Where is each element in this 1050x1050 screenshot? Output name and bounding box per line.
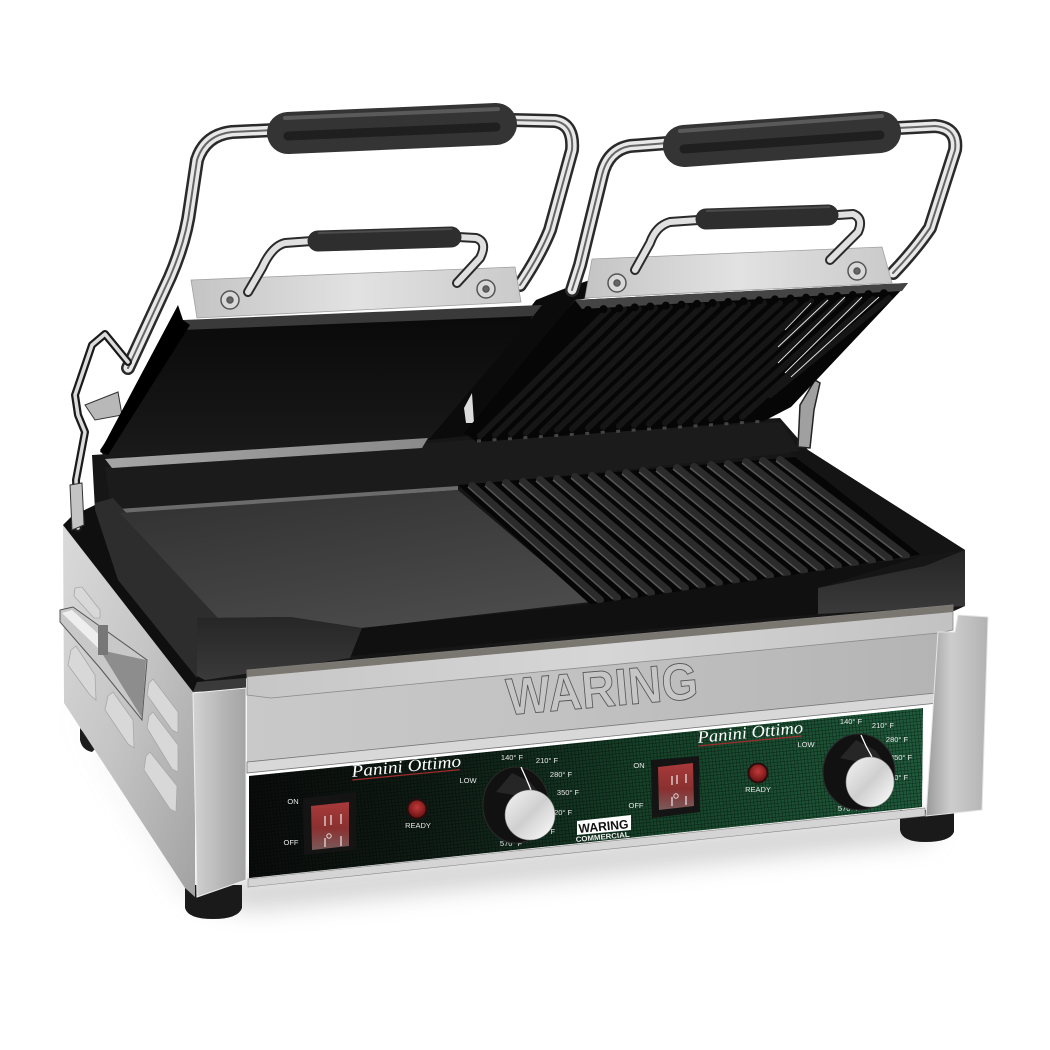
knob left — [483, 767, 555, 843]
temperature labels left: 280° F — [550, 770, 573, 779]
right rim — [790, 450, 965, 556]
WARING embossed logo: WARING — [504, 652, 700, 727]
temperature labels left — [459, 753, 580, 848]
labels left switch — [284, 797, 299, 847]
temperature labels left: 420° F — [550, 808, 573, 817]
knob right — [823, 734, 895, 810]
ribbed grill plate — [458, 457, 925, 606]
temperature labels left: 210° F — [536, 756, 559, 765]
temperature labels right: LOW — [797, 740, 815, 749]
lower steel strip — [247, 693, 938, 773]
flat griddle plate — [120, 490, 590, 628]
right hinge — [798, 380, 820, 448]
front right post — [926, 615, 988, 816]
left sloped side face and rim — [95, 498, 222, 678]
temperature labels left: 570° F — [500, 839, 523, 848]
rear wall — [105, 422, 800, 510]
gray toothed top band — [575, 283, 908, 309]
left large handle tube — [128, 120, 572, 368]
brand: Panini Ottimo right: Panini Ottimo — [695, 718, 804, 747]
dark seam between side panel and housing — [63, 505, 205, 692]
control panel — [248, 708, 925, 887]
temperature labels right: 140° F — [840, 717, 863, 726]
front lip of housing — [350, 556, 922, 656]
right front wedge — [818, 550, 965, 614]
left lid lower edge — [105, 438, 428, 468]
floor shadow — [64, 700, 930, 905]
ready lamp left — [405, 798, 431, 830]
foot: rear right — [900, 810, 954, 842]
left hinge loop and latch — [70, 334, 128, 530]
foot: front left — [185, 885, 242, 919]
left big handle grip — [285, 109, 498, 136]
left lid plate — [100, 316, 533, 458]
temperature labels left: 500° F — [533, 827, 556, 836]
right big handle grip — [680, 116, 882, 149]
right large handle tube — [572, 126, 955, 290]
right lid screws — [608, 262, 866, 292]
left front wedge — [197, 617, 362, 680]
labels left switch: OFF — [284, 838, 299, 847]
bottom trim — [248, 808, 925, 887]
chrome hinge shard between lids — [464, 393, 474, 423]
housing black body — [92, 418, 965, 682]
left lid rim — [180, 305, 542, 333]
ready lamp left: READY — [405, 821, 431, 830]
Waring Commercial logo: COMMERCIAL — [575, 830, 630, 844]
temperature labels right: 420° F — [886, 773, 909, 782]
side latch handle — [60, 607, 147, 720]
front left post — [193, 678, 246, 897]
temperature labels left: 140° F — [501, 753, 524, 762]
lower teeth — [477, 421, 766, 441]
labels right switch — [628, 761, 645, 810]
Waring Commercial logo: WARING — [578, 817, 629, 836]
temperature labels left: LOW — [459, 776, 477, 785]
rocker switch right — [651, 756, 700, 818]
ready lamp right — [745, 762, 771, 794]
temperature labels right: 210° F — [872, 721, 895, 730]
rocker switch left — [303, 792, 356, 855]
ready lamp right: READY — [745, 785, 771, 794]
left steel mounting plate — [191, 267, 521, 318]
white gaps between ribs — [778, 297, 879, 377]
left small handle — [248, 229, 483, 292]
temperature labels left: 350° F — [557, 788, 580, 797]
left lid screws — [221, 280, 495, 309]
temperature labels right: 570° F — [838, 804, 861, 813]
temperature labels right: 350° F — [890, 753, 913, 762]
foot: rear left — [80, 728, 96, 752]
dark arm between the two lids — [428, 280, 590, 440]
griddle back edge highlight — [118, 486, 458, 514]
brand: Panini Ottimo left: Panini Ottimo — [349, 752, 462, 781]
left side panel — [63, 525, 195, 897]
labels right switch: ON — [633, 761, 645, 770]
labels right switch: OFF — [628, 801, 644, 810]
front brushed steel panel — [247, 628, 938, 764]
right small handle — [635, 207, 860, 270]
temperature labels right — [797, 717, 913, 813]
temperature labels right: 280° F — [886, 735, 909, 744]
left lid shadow edge — [100, 305, 190, 455]
right ribbed lid — [464, 283, 908, 442]
labels left switch: ON — [287, 797, 299, 806]
Waring Commercial logo — [575, 815, 631, 844]
upper steel lip — [247, 605, 953, 698]
side louvers — [68, 587, 178, 812]
right steel mounting plate — [585, 247, 892, 298]
